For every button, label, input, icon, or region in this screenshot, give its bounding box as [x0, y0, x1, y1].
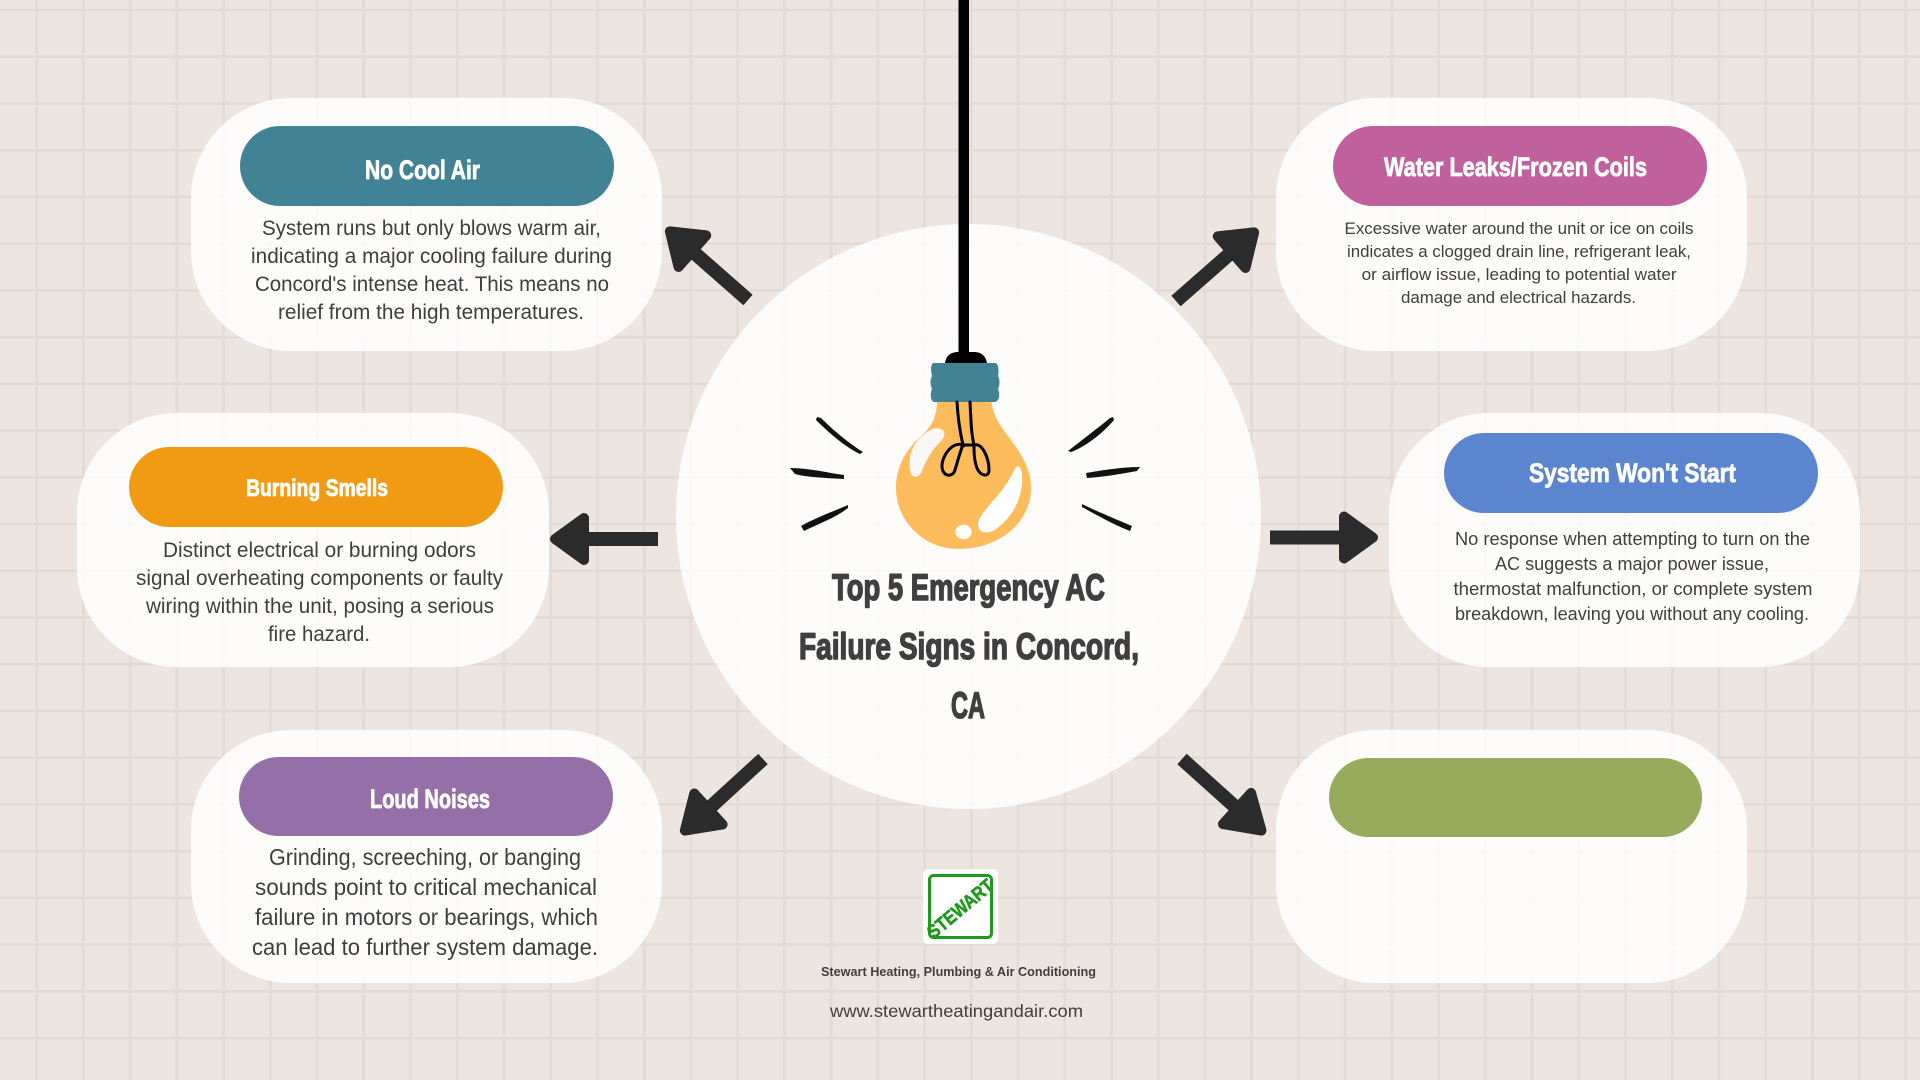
description: System Won't Start: AC suggests a major power issue,: [1495, 553, 1769, 574]
description: Burning Smells: signal overheating components or faulty: [136, 566, 503, 590]
pill heading: System Won't Start: [1444, 433, 1818, 513]
description: No Cool Air: [251, 216, 612, 324]
description: No Cool Air: System runs but only blows warm air,: [262, 216, 601, 240]
pill heading: System Won't Start: System Won't Start: [1529, 458, 1736, 488]
pill heading: Loud Noises: Loud Noises: [370, 784, 490, 814]
description: Loud Noises: sounds point to critical mechanical: [255, 874, 597, 900]
description: Loud Noises: failure in motors or bearings, which: [255, 904, 598, 930]
title: CA: [951, 685, 985, 726]
arrow: to System Won't Start: [1270, 516, 1373, 558]
panel: Water Leaks/Frozen Coils: [1276, 98, 1747, 351]
pill heading: Water Leaks/Frozen Coils: [1333, 126, 1707, 206]
description: Water Leaks: damage and electrical hazards.: [1401, 288, 1636, 307]
arrow: to Loud Noises: [671, 744, 777, 846]
pill heading: No Cool Air: No Cool Air: [365, 155, 480, 185]
description: Burning Smells: Distinct electrical or burning odors: [163, 538, 476, 562]
description: Water Leaks: or airflow issue, leading to potential water: [1362, 265, 1677, 284]
description: Burning Smells: wiring within the unit, posing a serious: [145, 594, 494, 618]
icon: light rays: [790, 417, 1140, 531]
panel: empty green: [1276, 730, 1747, 983]
panel: Burning Smells: [77, 413, 549, 667]
title: Failure Signs in Concord,: [799, 626, 1139, 667]
pill heading: Water Leaks/Frozen Coils: Water Leaks/Frozen Coils: [1384, 152, 1647, 182]
pill heading: No Cool Air: [240, 126, 614, 206]
arrow: to Water Leaks: [1162, 217, 1268, 317]
description: Loud Noises: can lead to further system damage.: [252, 934, 598, 960]
description: System Won't Start: No response when attempting to turn on the: [1455, 528, 1810, 549]
description: System Won't Start: breakdown, leaving you without any cooling.: [1455, 603, 1809, 624]
description: Burning Smells: fire hazard.: [268, 622, 370, 646]
pill: empty green: [1329, 758, 1702, 837]
central circle: [676, 224, 1261, 809]
description: No Cool Air: Concord's intense heat. This means no: [255, 272, 609, 296]
pill heading: Loud Noises: [239, 757, 613, 836]
description: Loud Noises: Grinding, screeching, or banging: [269, 844, 581, 870]
description: Burning Smells: [136, 538, 503, 646]
website: www.stewartheatingandair.com: [829, 1001, 1083, 1021]
company name: Stewart Heating, Plumbing & Air Conditioning: [821, 964, 1096, 979]
panel: System Won't Start: [1389, 413, 1860, 667]
description: No Cool Air: relief from the high temperatures.: [278, 300, 584, 324]
description: System Won't Start: [1454, 528, 1812, 624]
description: Water Leaks: [1344, 219, 1694, 307]
icon: hanging light bulb: [790, 0, 1140, 549]
description: Water Leaks: Excessive water around the unit or ice on coils: [1344, 219, 1694, 238]
description: System Won't Start: thermostat malfunction, or complete system: [1454, 578, 1812, 599]
arrow: to No Cool Air: [656, 216, 762, 316]
pill heading: Burning Smells: Burning Smells: [246, 475, 388, 502]
title: [799, 567, 1139, 726]
title: Top 5 Emergency AC: [832, 567, 1105, 608]
arrow: to Burning Smells: [555, 518, 658, 560]
description: Water Leaks: indicates a clogged drain line, refrigerant leak,: [1347, 242, 1691, 261]
description: Loud Noises: [252, 844, 598, 960]
description: No Cool Air: indicating a major cooling failure during: [251, 244, 612, 268]
pill heading: Burning Smells: [129, 447, 503, 527]
arrow: to empty green panel: [1168, 743, 1276, 846]
panel: No Cool Air: [191, 98, 662, 351]
panel: Loud Noises: [191, 730, 662, 983]
logo: Stewart: STEWART: [923, 875, 998, 943]
